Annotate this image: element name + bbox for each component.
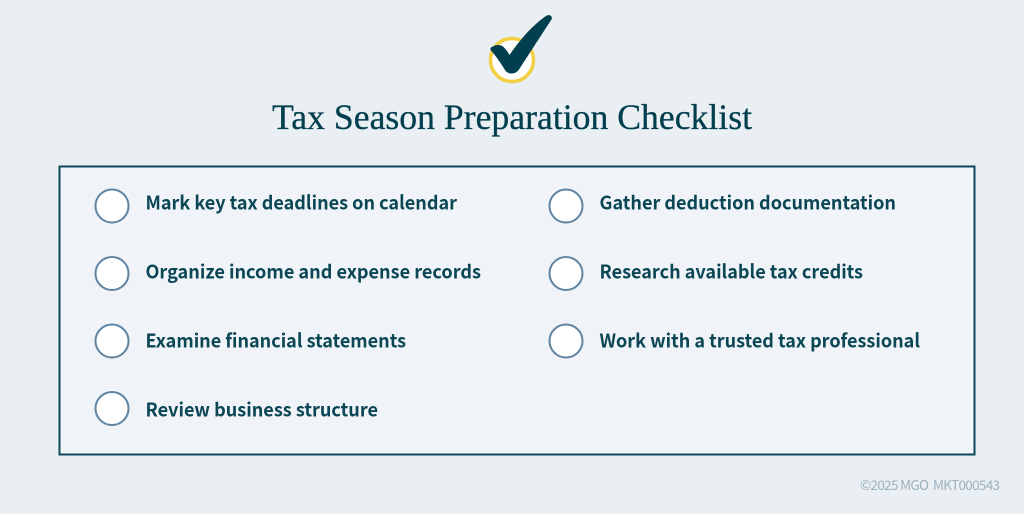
- item: Mark key tax deadlines on calendar: Mark key tax deadlines on calendar: [146, 188, 458, 216]
- item: Organize income and expense records: [96, 257, 481, 290]
- icon: checkmark in circle: [490, 15, 552, 82]
- item: Work with a trusted tax professional: [550, 324, 920, 358]
- panel: checklist: [60, 166, 974, 454]
- title: Tax Season Preparation Checklist: [272, 97, 752, 137]
- item: Research available tax credits: [550, 257, 863, 290]
- item: Gather deduction documentation: [550, 188, 896, 222]
- item: Examine financial statements: [96, 324, 406, 358]
- item: Research available tax credits: Research available tax credits: [600, 258, 863, 284]
- footer copyright: ©2025 MGO MKT000543: [860, 474, 1000, 494]
- item: Work with a trusted tax professional: Work with a trusted tax professional: [600, 326, 920, 354]
- item: Gather deduction documentation: Gather deduction documentation: [600, 188, 896, 216]
- item: Review business structure: [96, 392, 378, 425]
- item: Review business structure: Review business structure: [146, 396, 378, 422]
- item: Examine financial statements: Examine financial statements: [146, 326, 406, 354]
- item: Mark key tax deadlines on calendar: [96, 188, 458, 222]
- item: Organize income and expense records: Organize income and expense records: [146, 258, 481, 284]
